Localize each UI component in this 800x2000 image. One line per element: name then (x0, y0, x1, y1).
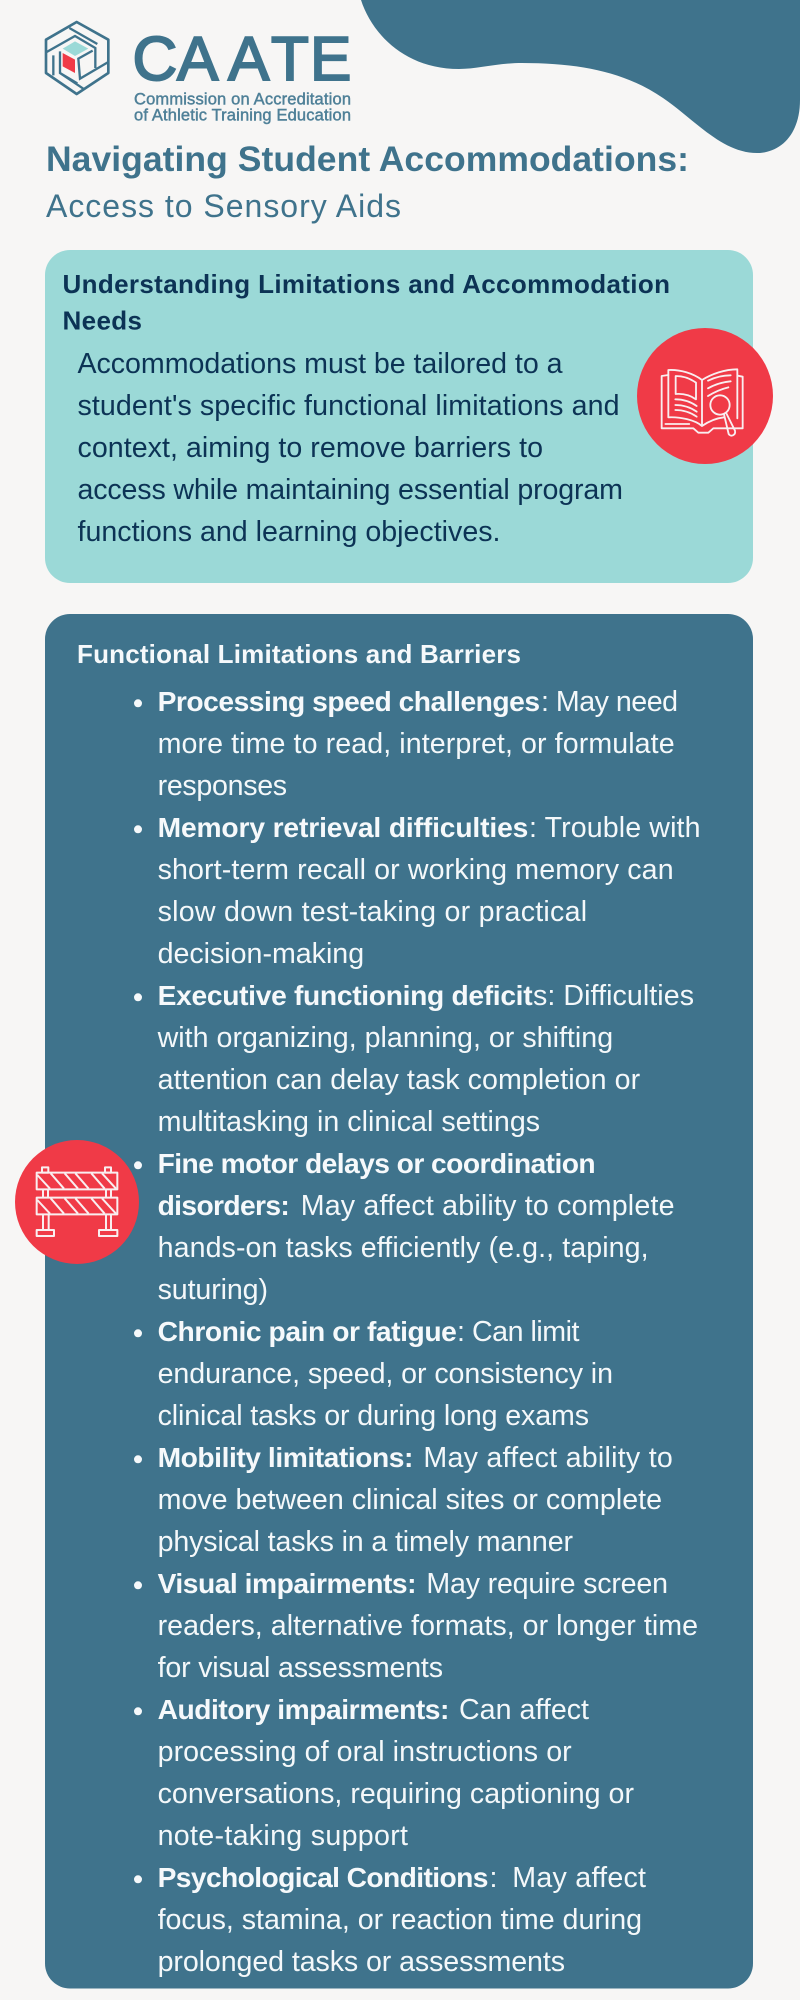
list item: processing speed: responses (158, 770, 287, 802)
list item: psychological: May affect (512, 1862, 646, 1894)
list item: executive functioning: multitasking in clinical settings (158, 1106, 540, 1138)
list item: fine motor: hands-on tasks efficiently (e.g., taping, (158, 1232, 649, 1264)
list item: visual (134, 1567, 698, 1684)
list item: auditory: processing of oral instructions or (158, 1736, 572, 1768)
list item: mobility: Mobility limitations: (158, 1441, 413, 1473)
logo tagline: of Athletic Training Education (134, 107, 351, 125)
list item: fine motor (134, 1147, 674, 1306)
logo: CAATE (46, 22, 351, 125)
list item: memory retrieval: decision-making (158, 938, 364, 970)
list item: visual: for visual assessments (158, 1652, 443, 1684)
list item: executive functioning: s: Difficulties (533, 980, 694, 1012)
list item: memory retrieval: slow down test-taking or practical (158, 896, 587, 928)
list item: executive functioning: attention can delay task completion or (158, 1064, 641, 1096)
list item: memory retrieval: : Trouble with (529, 812, 700, 844)
title: Navigating Student Accommodations: (46, 139, 689, 179)
list item: visual: May require screen (426, 1568, 668, 1600)
list item: processing speed: more time to read, interpret, or formulate (158, 728, 675, 760)
list item: processing speed: Processing speed challenges (158, 685, 540, 717)
list item: fine motor: suturing) (158, 1274, 268, 1306)
list item: processing speed (134, 685, 678, 802)
list item: visual: Visual impairments: (158, 1567, 416, 1599)
list item: psychological: focus, stamina, or reaction time during (158, 1904, 642, 1936)
list item: chronic pain: clinical tasks or during long exams (158, 1400, 589, 1432)
panel: functional limitations and barriers (45, 614, 753, 1988)
list item: mobility (134, 1441, 673, 1558)
list item: executive functioning (134, 979, 694, 1138)
panel: understanding limitations (45, 250, 753, 583)
decorative corner blob (361, 0, 800, 153)
logo wordmark: CAATE (132, 25, 351, 94)
list item: visual: readers, alternative formats, or longer time (158, 1610, 698, 1642)
list item: chronic pain: endurance, speed, or consistency in (158, 1358, 613, 1390)
list item: fine motor: Fine motor delays or coordination (158, 1147, 596, 1179)
panel body text: student's specific functional limitations and (78, 390, 620, 422)
list item: psychological: prolonged tasks or assessments (158, 1946, 565, 1978)
icon: open book with magnifier (637, 328, 773, 464)
list item: mobility: May affect ability to (423, 1442, 673, 1474)
list item: chronic pain: Chronic pain or fatigue (158, 1315, 457, 1347)
subtitle: Access to Sensory Aids (46, 188, 401, 224)
panel heading (62, 269, 670, 335)
list item: executive functioning: Executive functioning deficit (158, 979, 533, 1011)
list item: psychological: : (490, 1862, 497, 1894)
list item: psychological: Psychological Conditions (158, 1861, 488, 1893)
list item: auditory (134, 1693, 634, 1852)
panel heading: Understanding Limitations and Accommodation (62, 269, 670, 299)
list item: fine motor: May affect ability to complete (301, 1190, 674, 1222)
list item: psychological (134, 1861, 646, 1978)
list item: mobility: move between clinical sites or complete (158, 1484, 662, 1516)
list item: chronic pain (134, 1315, 613, 1432)
list item: memory retrieval (134, 811, 700, 970)
panel body text: access while maintaining essential program (78, 474, 623, 506)
icon: road barrier (15, 1140, 139, 1264)
logo tagline: Commission on Accreditation (134, 90, 351, 108)
logo tagline (134, 90, 351, 125)
panel body text: context, aiming to remove barriers to (78, 432, 543, 464)
list item: memory retrieval: short-term recall or working memory can (158, 854, 674, 886)
list item: auditory: Can affect (459, 1694, 589, 1726)
list item: chronic pain: : Can limit (457, 1316, 580, 1348)
panel body text (78, 348, 623, 548)
list item: processing speed: : May need (541, 686, 678, 718)
icon: hexagon logo mark (46, 22, 108, 94)
panel heading: Needs (62, 305, 142, 335)
list item: auditory: conversations, requiring captioning or (158, 1778, 634, 1810)
list item: mobility: physical tasks in a timely manner (158, 1526, 573, 1558)
panel body text: functions and learning objectives. (78, 516, 500, 548)
list item: fine motor: disorders: (158, 1189, 290, 1221)
list item: auditory: note-taking support (158, 1820, 408, 1852)
list item: memory retrieval: Memory retrieval difficulties (158, 811, 528, 843)
panel heading: Functional Limitations and Barriers (77, 639, 521, 669)
list item: auditory: Auditory impairments: (158, 1693, 449, 1725)
list item: executive functioning: with organizing, planning, or shifting (157, 1022, 613, 1054)
panel body text: Accommodations must be tailored to a (78, 348, 563, 380)
